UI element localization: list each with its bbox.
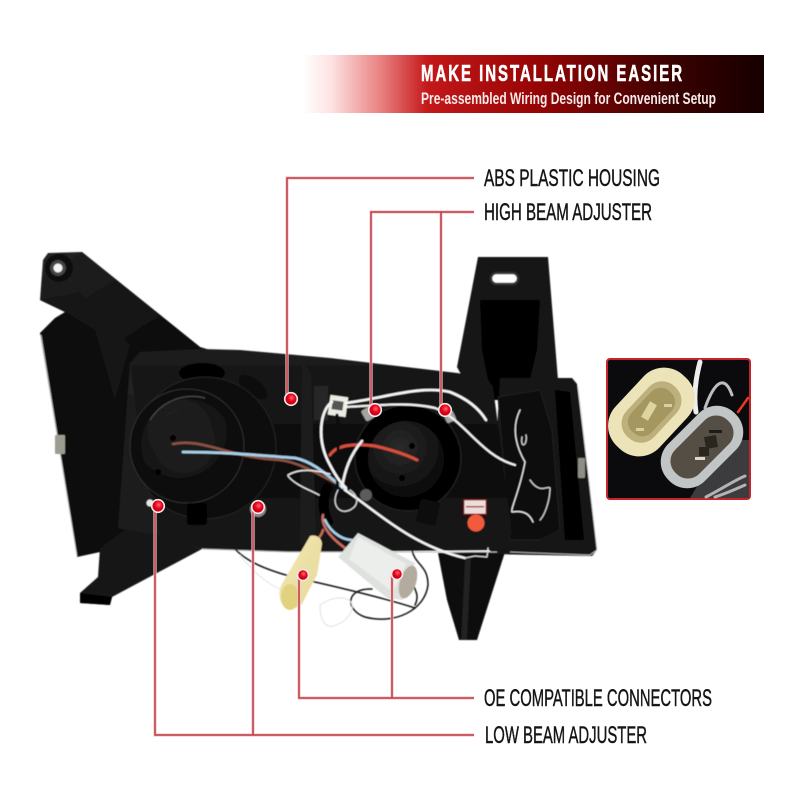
connector plug module [314, 386, 328, 420]
wiring harness [173, 390, 550, 558]
label: low beam adjuster: LOW BEAM ADJUSTER [485, 722, 647, 749]
loose wires under housing [236, 550, 428, 619]
background wires [695, 362, 748, 497]
lamp inner module [498, 390, 560, 540]
right bulb cap [355, 405, 461, 526]
right bulb red wire [330, 445, 417, 460]
leader line: ABS plastic housing [287, 178, 474, 398]
lower right bracket [438, 552, 505, 640]
left bulb cap [130, 377, 276, 525]
right clip [578, 458, 585, 478]
bracket bolt hole [45, 254, 73, 282]
main housing [118, 349, 512, 552]
left bulb brown wire [173, 443, 345, 488]
inset background shading [690, 440, 749, 498]
right top bracket [457, 257, 560, 400]
banner: make installation easier [303, 55, 764, 113]
adjuster screws [146, 406, 457, 517]
left bulb blue wire [183, 452, 346, 490]
lamp module thin wires [512, 410, 533, 522]
cream connector [279, 535, 322, 610]
white connector [338, 533, 421, 601]
left flange edge highlight [41, 335, 77, 556]
right flange edge highlight [510, 386, 597, 555]
lower left foot [80, 528, 202, 605]
left side silhouette [40, 252, 210, 557]
left clip [55, 435, 65, 454]
inset panel: connector close-up [596, 356, 754, 499]
QC sticker [464, 500, 486, 532]
lower housing edge highlight [202, 549, 497, 552]
leader lines: low beam adjuster [155, 506, 474, 735]
headlight assembly photo [40, 252, 597, 640]
leader lines: OE compatible connectors [299, 575, 474, 698]
cream connector [596, 356, 707, 468]
loom [324, 488, 328, 522]
label: high beam adjuster: HIGH BEAM ADJUSTER [484, 199, 652, 226]
top left mounting bracket [40, 252, 200, 352]
leader lines: high beam adjuster [371, 212, 474, 410]
white wires [321, 402, 346, 488]
harness wires to connectors [323, 515, 352, 553]
right lens flange [490, 378, 597, 556]
gray connector [650, 395, 754, 499]
label: ABS plastic housing: ABS PLASTIC HOUSING [484, 165, 660, 192]
small grommets [179, 363, 225, 383]
callout marker dots [152, 393, 451, 580]
slot hole [491, 273, 518, 284]
barcode tag [328, 395, 348, 417]
